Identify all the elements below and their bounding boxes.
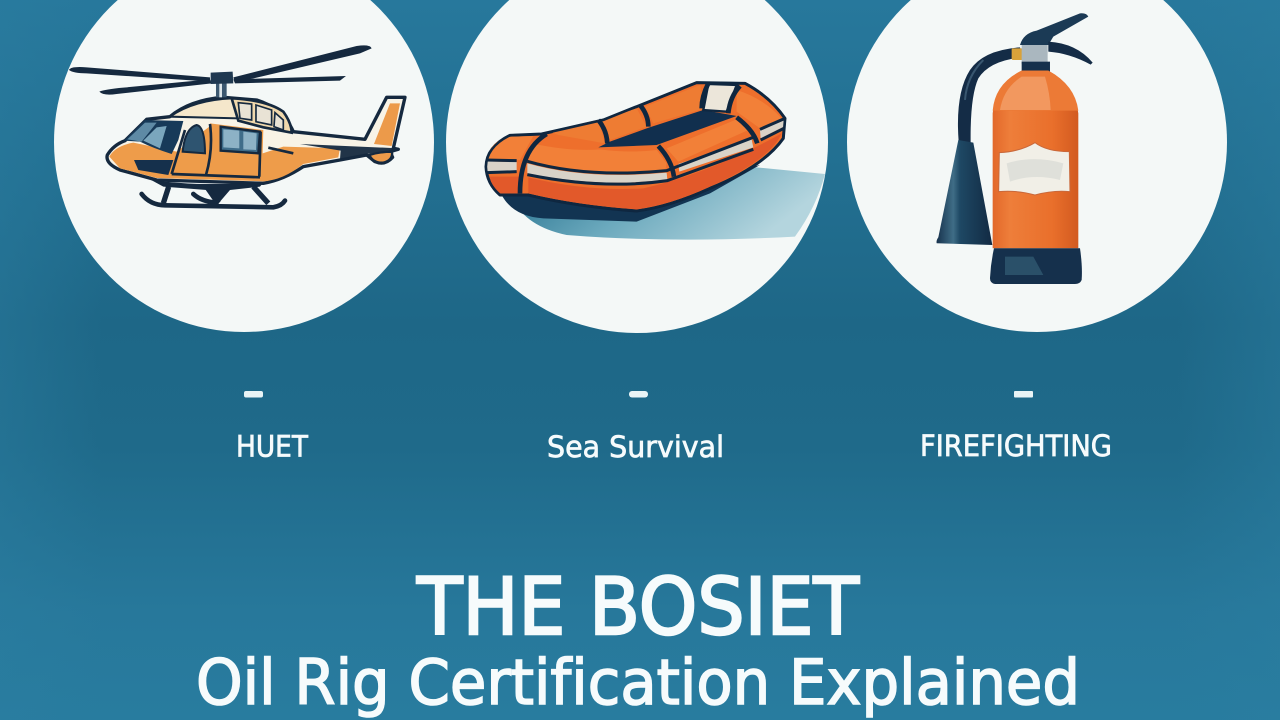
panel: HUET: [54, 0, 434, 332]
title: [196, 563, 1080, 719]
subheading: Oil Rig Certification Explained: [196, 646, 1080, 719]
circle: Sea Survival: [446, 0, 828, 333]
panel: Firefighting: [847, 0, 1227, 332]
label block: Sea Survival: [547, 391, 724, 464]
icon: helicopter: [69, 45, 405, 207]
label: HUET: HUET: [236, 430, 308, 464]
heading: The BOSIET: THE BOSIET: [416, 563, 859, 653]
circle: HUET: [54, 0, 434, 332]
circle: Firefighting: [847, 0, 1227, 332]
label block: Firefighting: [920, 391, 1112, 463]
label block: HUET: [236, 391, 308, 464]
label: Sea Survival: Sea Survival: [547, 430, 724, 464]
dash: HUET: [244, 391, 263, 398]
icon: fire extinguisher: [937, 13, 1093, 284]
panel: Sea Survival: [446, 0, 828, 333]
icon: life raft: [486, 83, 825, 240]
dash: Sea Survival: [629, 391, 648, 398]
dash: Firefighting: [1014, 391, 1033, 398]
label: FIREFIGHTING: FIREFIGHTING: [920, 429, 1112, 463]
